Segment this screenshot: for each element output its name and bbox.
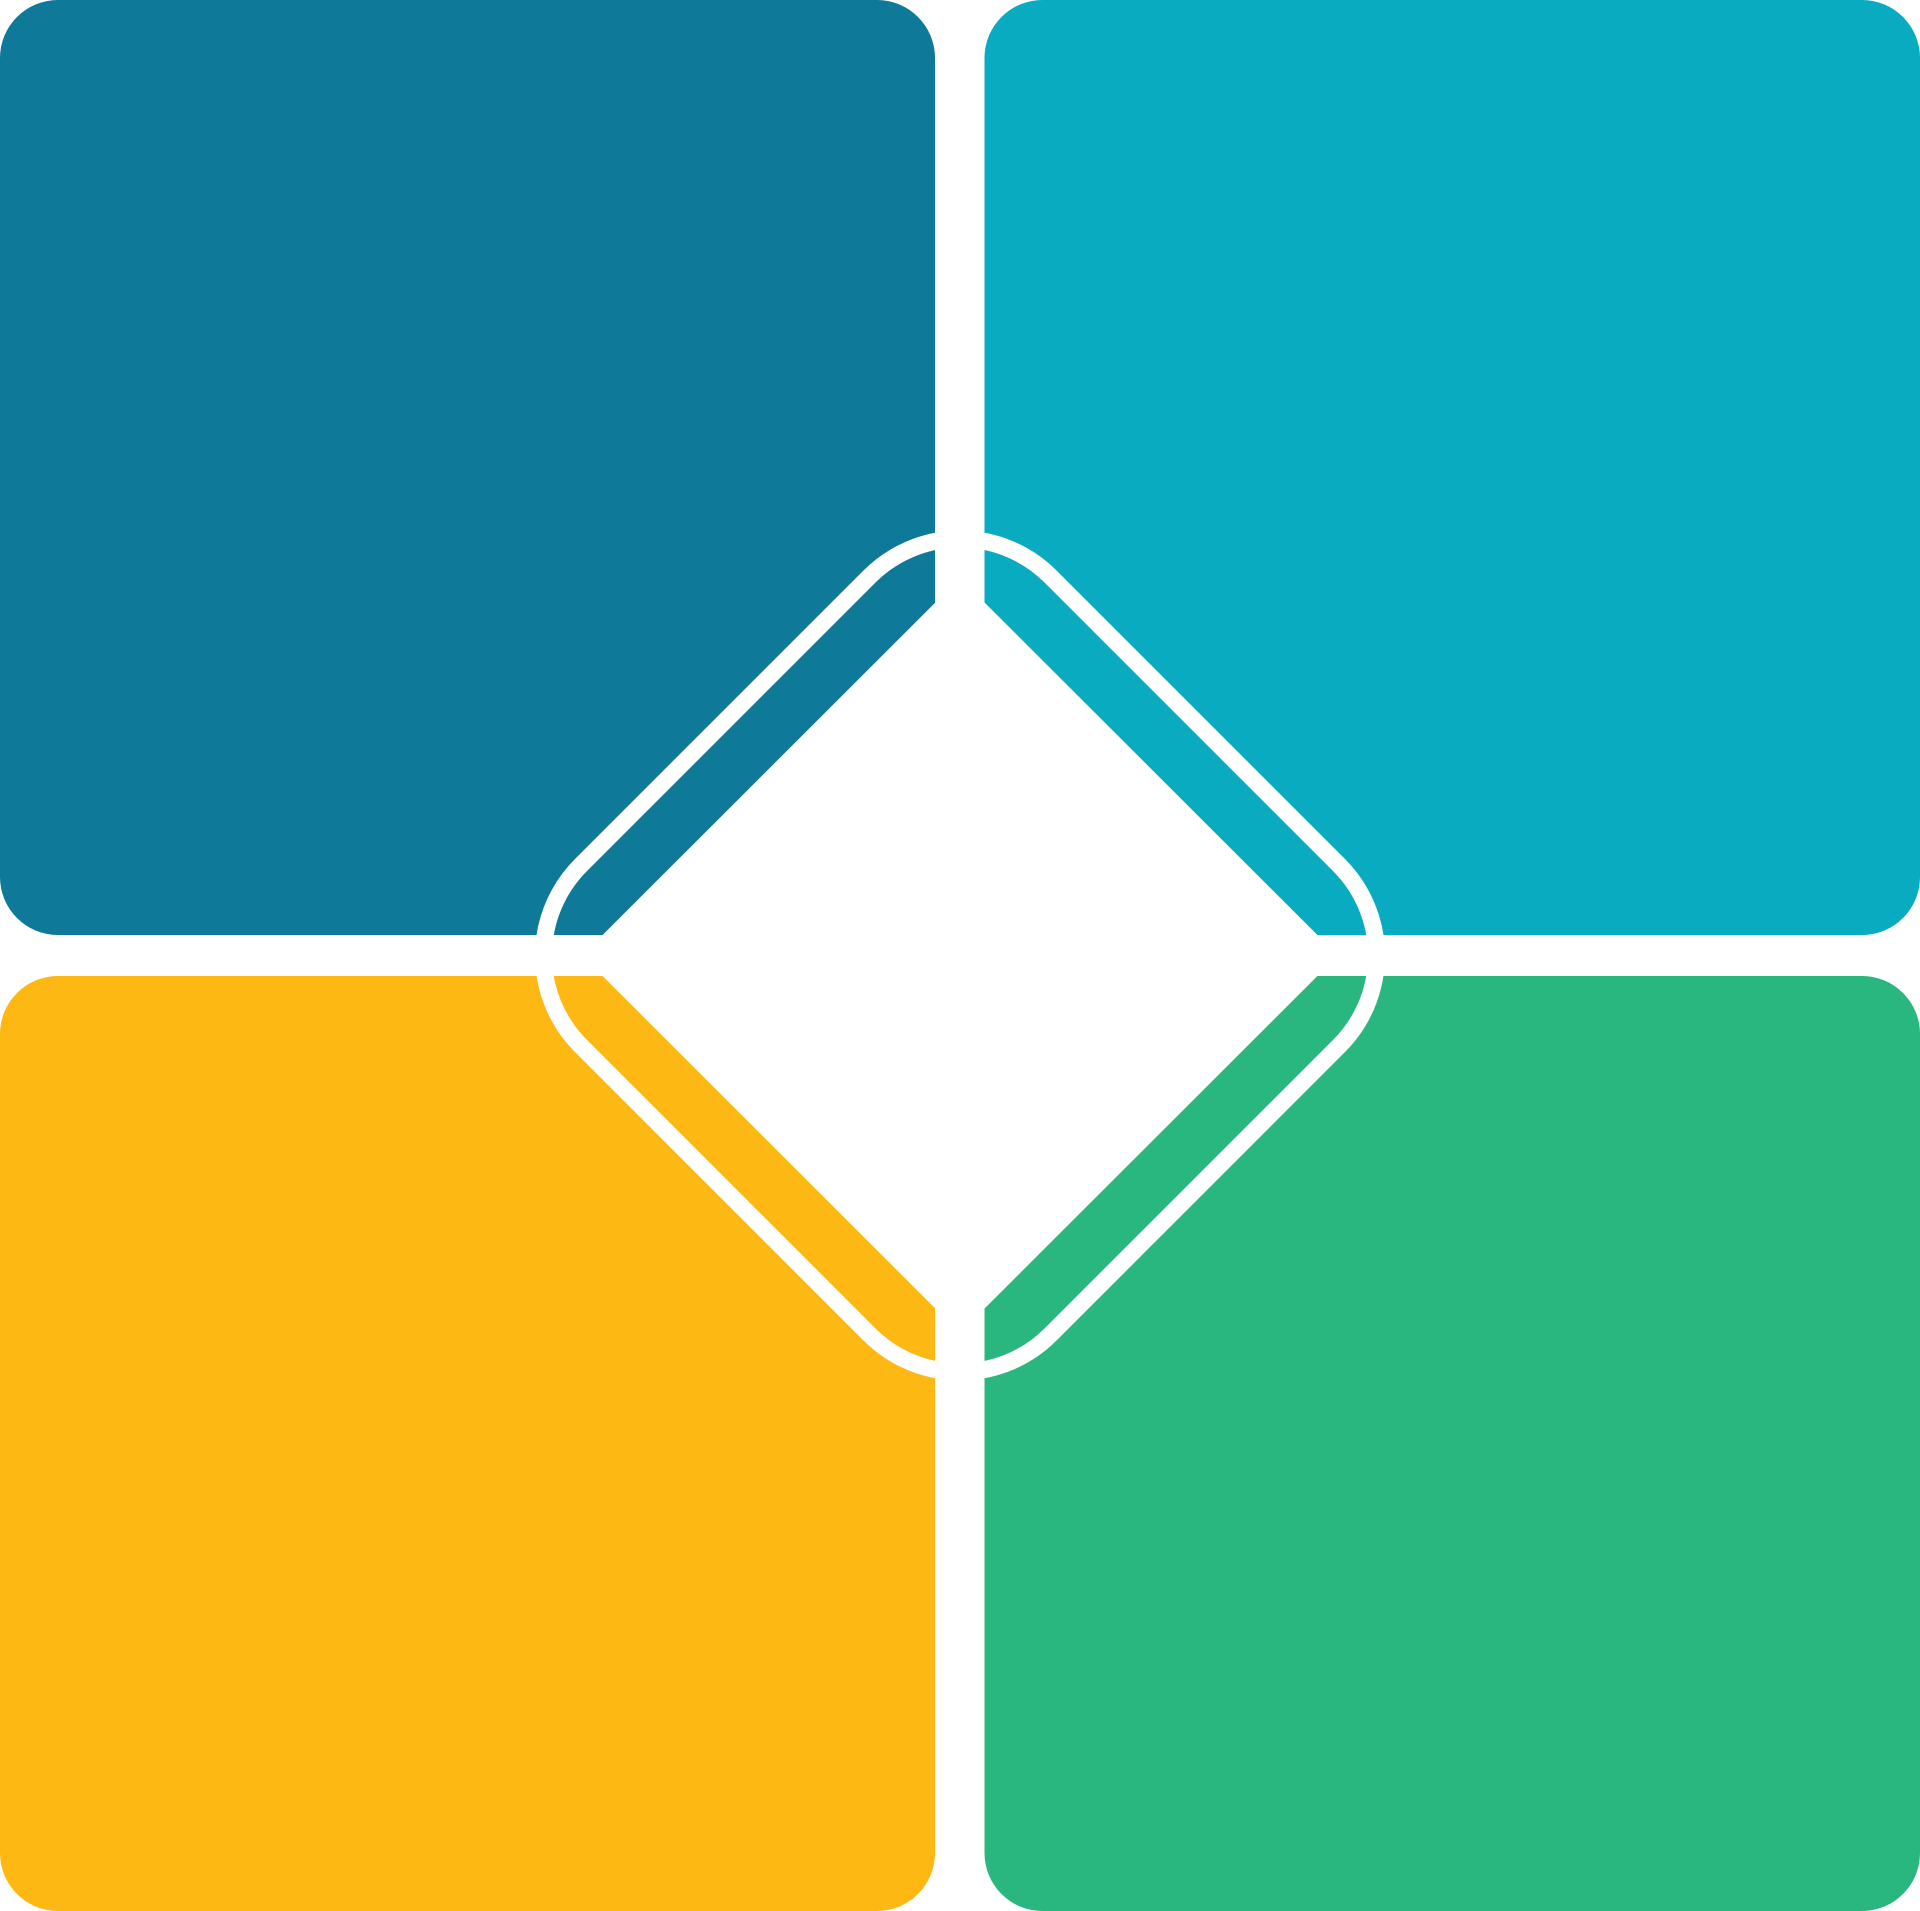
panel: bottom-right green [984, 976, 1920, 1911]
panel: bottom-left yellow [0, 976, 935, 1911]
panel: top-right cyan [984, 0, 1920, 935]
centre: white diamond [582, 578, 1338, 1333]
panel: top-left dark teal [0, 0, 935, 935]
ring: white rounded diamond outline [544, 539, 1376, 1372]
